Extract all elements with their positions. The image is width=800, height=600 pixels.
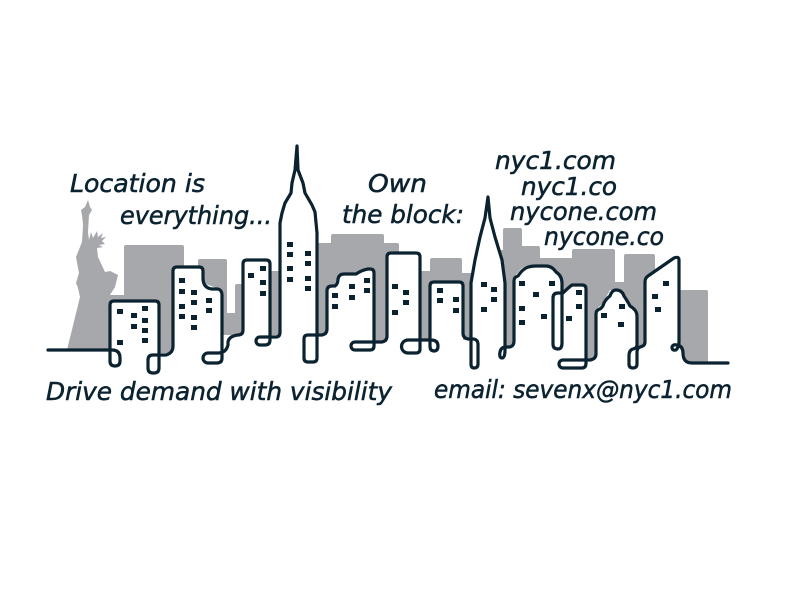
grey background skyline (67, 200, 708, 362)
continuous skyline line (48, 146, 728, 373)
contact email: email: sevenx@nyc1.com (434, 375, 732, 404)
grey buildings centre (310, 234, 480, 342)
grey buildings right (497, 228, 708, 362)
slogan: Location is everything: Location is (70, 169, 205, 198)
slogan: Location is everything: everything... (120, 201, 272, 230)
slogan: Drive demand with visibility: Drive demand with visibility (46, 377, 393, 406)
slogan: Own the block: the block: (342, 200, 464, 229)
domain list: nyc1.com (495, 146, 616, 175)
white building interiors (110, 145, 679, 373)
building windows (117, 242, 669, 345)
domain list: nycone.com (510, 197, 657, 226)
slogan: Own the block (342, 169, 464, 229)
grey buildings left (124, 245, 280, 353)
domain list (495, 146, 664, 251)
icon: Statue of Liberty silhouette (67, 200, 124, 350)
domain list: nycone.co (544, 222, 664, 251)
slogan: Own the block: Own (368, 169, 427, 198)
domain list: nyc1.co (521, 172, 617, 201)
slogan: Location is everything (70, 169, 272, 230)
